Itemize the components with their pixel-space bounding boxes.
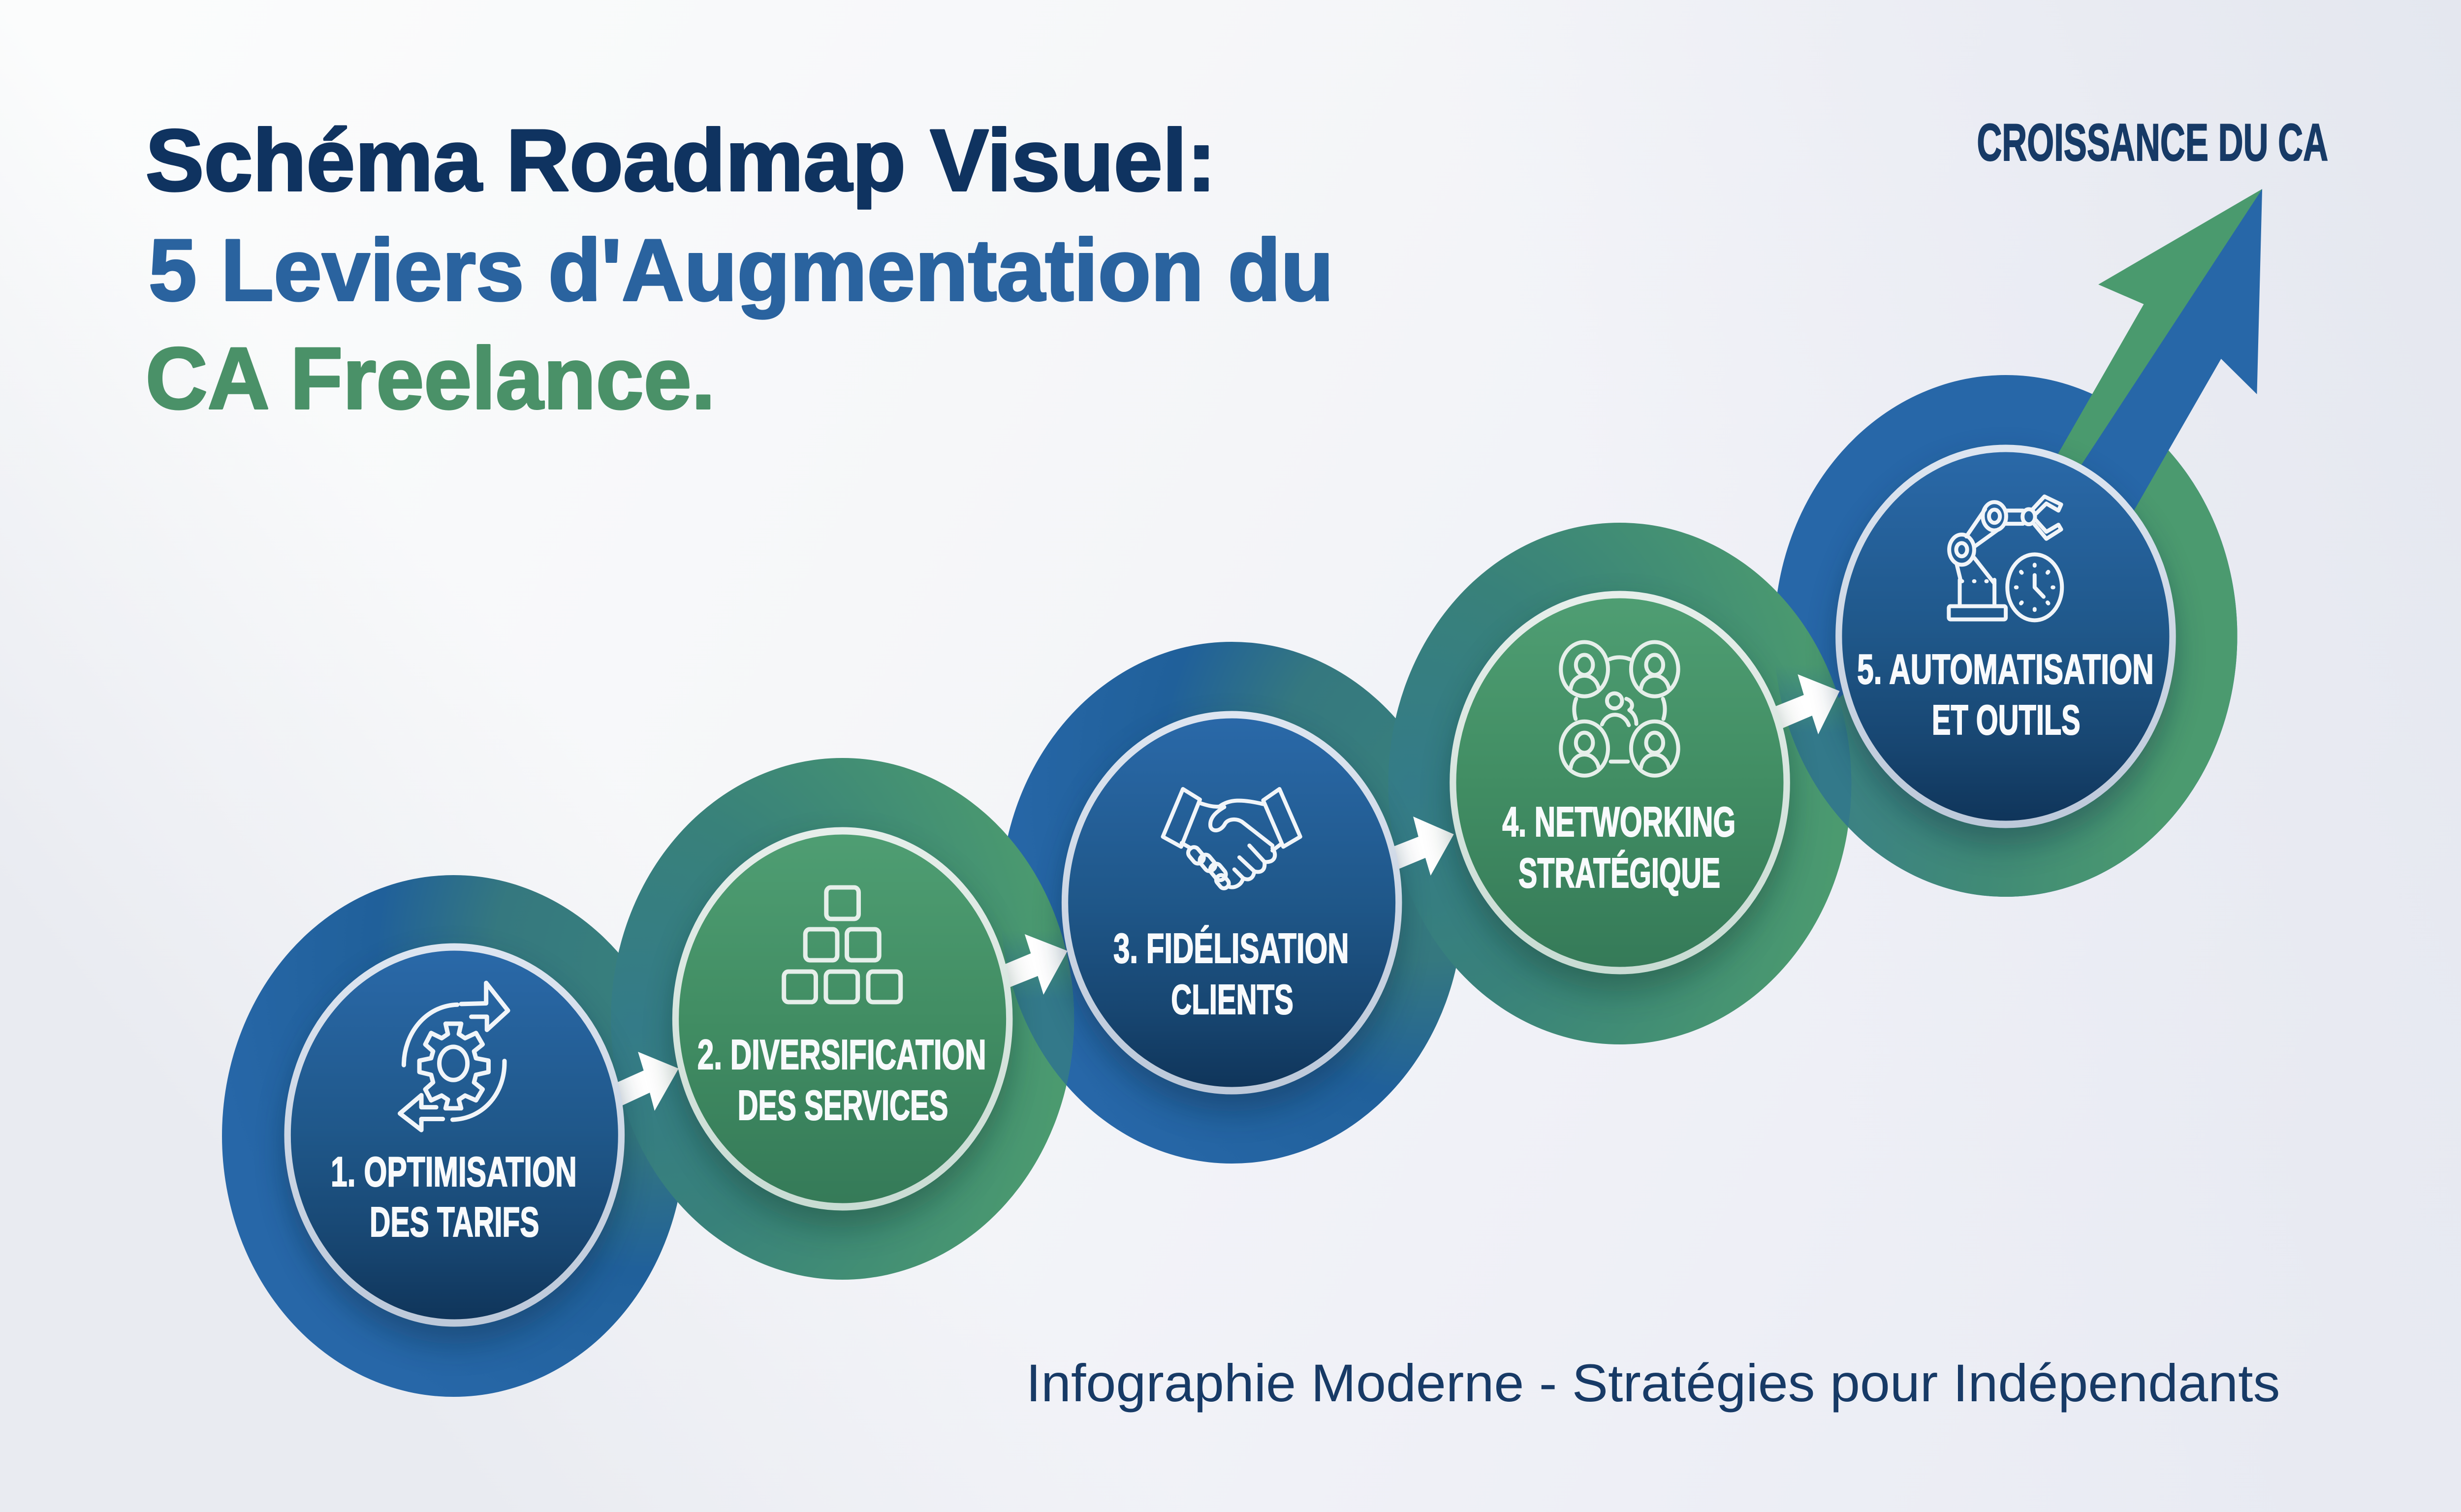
- connector arrow 2-3: [992, 934, 1068, 995]
- title line 2: 5 Leviers d'Augmentation du: [149, 221, 1334, 319]
- footer caption: Infographie Moderne - Stratégies pour Indépendants: [1026, 1354, 2280, 1413]
- connector arrow 1-2: [603, 1052, 679, 1111]
- label: 2. DIVERSIFICATION: [697, 1032, 986, 1078]
- outer disc 1: [222, 875, 685, 1397]
- connector arrow 3-4: [1381, 817, 1454, 876]
- icon: handshake: [1163, 789, 1300, 890]
- icon: gear with arrows: [400, 983, 508, 1130]
- step 3: CLIENTS: [1171, 976, 1294, 1023]
- label: 1. OPTIMISATION: [331, 1149, 577, 1196]
- icon: stacked blocks: [784, 887, 901, 1002]
- label: 5. AUTOMATISATION: [1857, 646, 2154, 693]
- title: [146, 111, 1334, 427]
- growth label: CROISSANCE DU CA: [1977, 113, 2328, 172]
- title line 1: Schéma Roadmap Visuel:: [146, 111, 1216, 209]
- overlap 4-5: [1779, 682, 1852, 827]
- icon: robot arm and clock: [1949, 497, 2062, 620]
- step 2: DES SERVICES: [738, 1082, 948, 1129]
- outer disc 4: [1388, 523, 1852, 1044]
- connector arrow 4-5: [1763, 674, 1840, 734]
- outer disc 5: [1777, 375, 2238, 897]
- overlap 2-3: [1005, 949, 1074, 1085]
- step 1: DES TARIFS: [370, 1199, 539, 1246]
- label: 3. FIDÉLISATION: [1113, 925, 1349, 972]
- title line 3: CA Freelance.: [146, 329, 715, 427]
- step 3: [1061, 715, 1403, 1111]
- step 5: [1834, 448, 2177, 845]
- outer disc 3: [1000, 642, 1463, 1164]
- step 2: [671, 831, 1014, 1228]
- growth arrow: [2027, 189, 2262, 551]
- step 4: [1449, 595, 1791, 991]
- outer disc 2: [611, 758, 1074, 1280]
- step 5: ET OUTILS: [1932, 697, 2081, 744]
- step 4: STRATÉGIQUE: [1518, 850, 1720, 897]
- icon: network of people: [1561, 642, 1678, 776]
- step 1: [283, 947, 626, 1344]
- label: 4. NETWORKING: [1502, 799, 1735, 846]
